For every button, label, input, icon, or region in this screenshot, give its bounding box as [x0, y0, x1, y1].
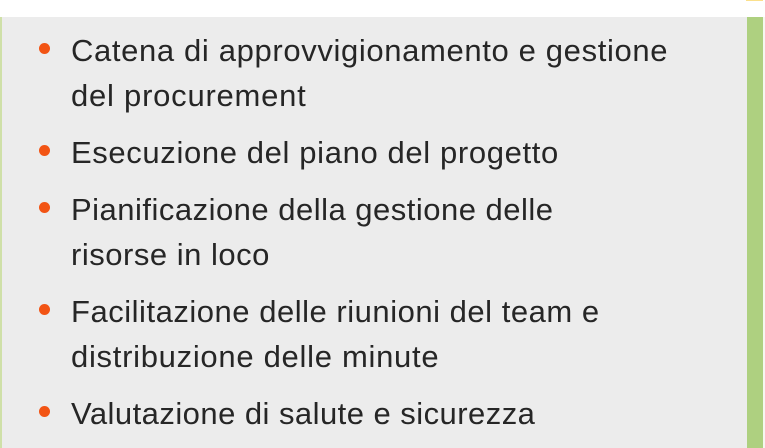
item 5: Valutazione di salute e sicurezza [71, 396, 535, 431]
bullet 2 [39, 145, 50, 156]
bullet 3 [39, 202, 50, 213]
item 3 line 2: risorse in loco [71, 237, 270, 272]
right margin strip [763, 17, 765, 448]
bullet 5 [39, 406, 50, 417]
item 3 line 1: Pianificazione della gestione delle [71, 192, 553, 227]
right green band [747, 17, 763, 448]
item 4 line 1: Facilitazione delle riunioni del team e [71, 294, 600, 329]
item 1 line 2: del procurement [71, 78, 307, 113]
item 1 line 1: Catena di approvvigionamento e gestione [71, 33, 668, 68]
left green edge [0, 17, 2, 448]
item 2: Esecuzione del piano del progetto [71, 135, 559, 170]
bullet 4 [39, 304, 50, 315]
bullet 1 [39, 43, 50, 54]
item 4 line 2: distribuzione delle minute [71, 339, 439, 374]
top yellow accent [746, 0, 763, 1]
